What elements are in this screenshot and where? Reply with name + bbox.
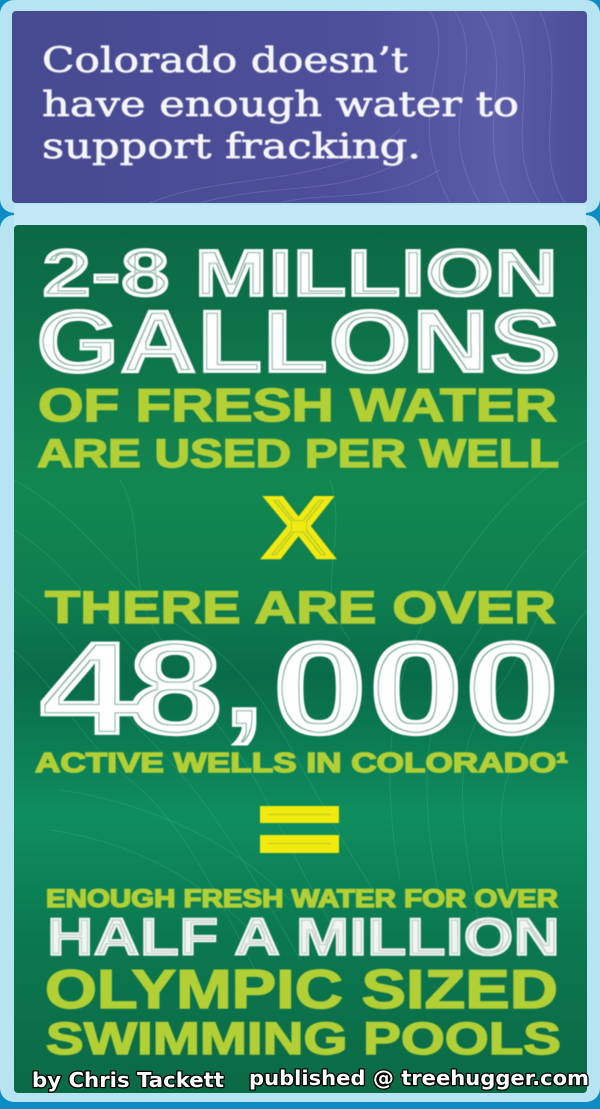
text: olympic sized: OLYMPIC SIZED xyxy=(45,958,558,1020)
number: 48,000: , xyxy=(222,618,266,752)
heading: intro statement: support fracking. xyxy=(42,127,421,167)
text: swimming pools: SWIMMING POOLS xyxy=(46,1013,561,1064)
heading: gallons: GALLONS xyxy=(36,291,561,391)
number: 48,000: 000 xyxy=(272,613,560,762)
panel: purple header xyxy=(12,11,587,203)
icon: multiply sign: X xyxy=(262,478,335,577)
panel: green main xyxy=(14,225,587,1093)
heading: intro statement: have enough water to xyxy=(42,85,519,125)
text: there are over: THERE ARE OVER xyxy=(45,582,556,633)
heading: intro statement: Colorado doesn’t xyxy=(42,41,408,81)
heading: half a million: HALF A MILLION xyxy=(47,908,560,967)
text: active wells in Colorado: ACTIVE WELLS IN COLORADO¹ xyxy=(35,747,568,778)
credit: author: by Chris Tackett xyxy=(32,1068,224,1092)
heading: 2-8 million: 2-8 MILLION xyxy=(42,236,558,311)
text: enough fresh water for over: ENOUGH FRESH WATER FOR OVER xyxy=(46,885,558,913)
credit: publisher: published @ treehugger.com xyxy=(249,1066,589,1090)
icon: equals sign xyxy=(260,806,339,853)
text: are used per well: ARE USED PER WELL xyxy=(37,432,559,476)
heading: intro statement xyxy=(42,41,519,167)
number: 48,000: 48 xyxy=(39,613,224,762)
text: of fresh water: OF FRESH WATER xyxy=(38,379,557,431)
